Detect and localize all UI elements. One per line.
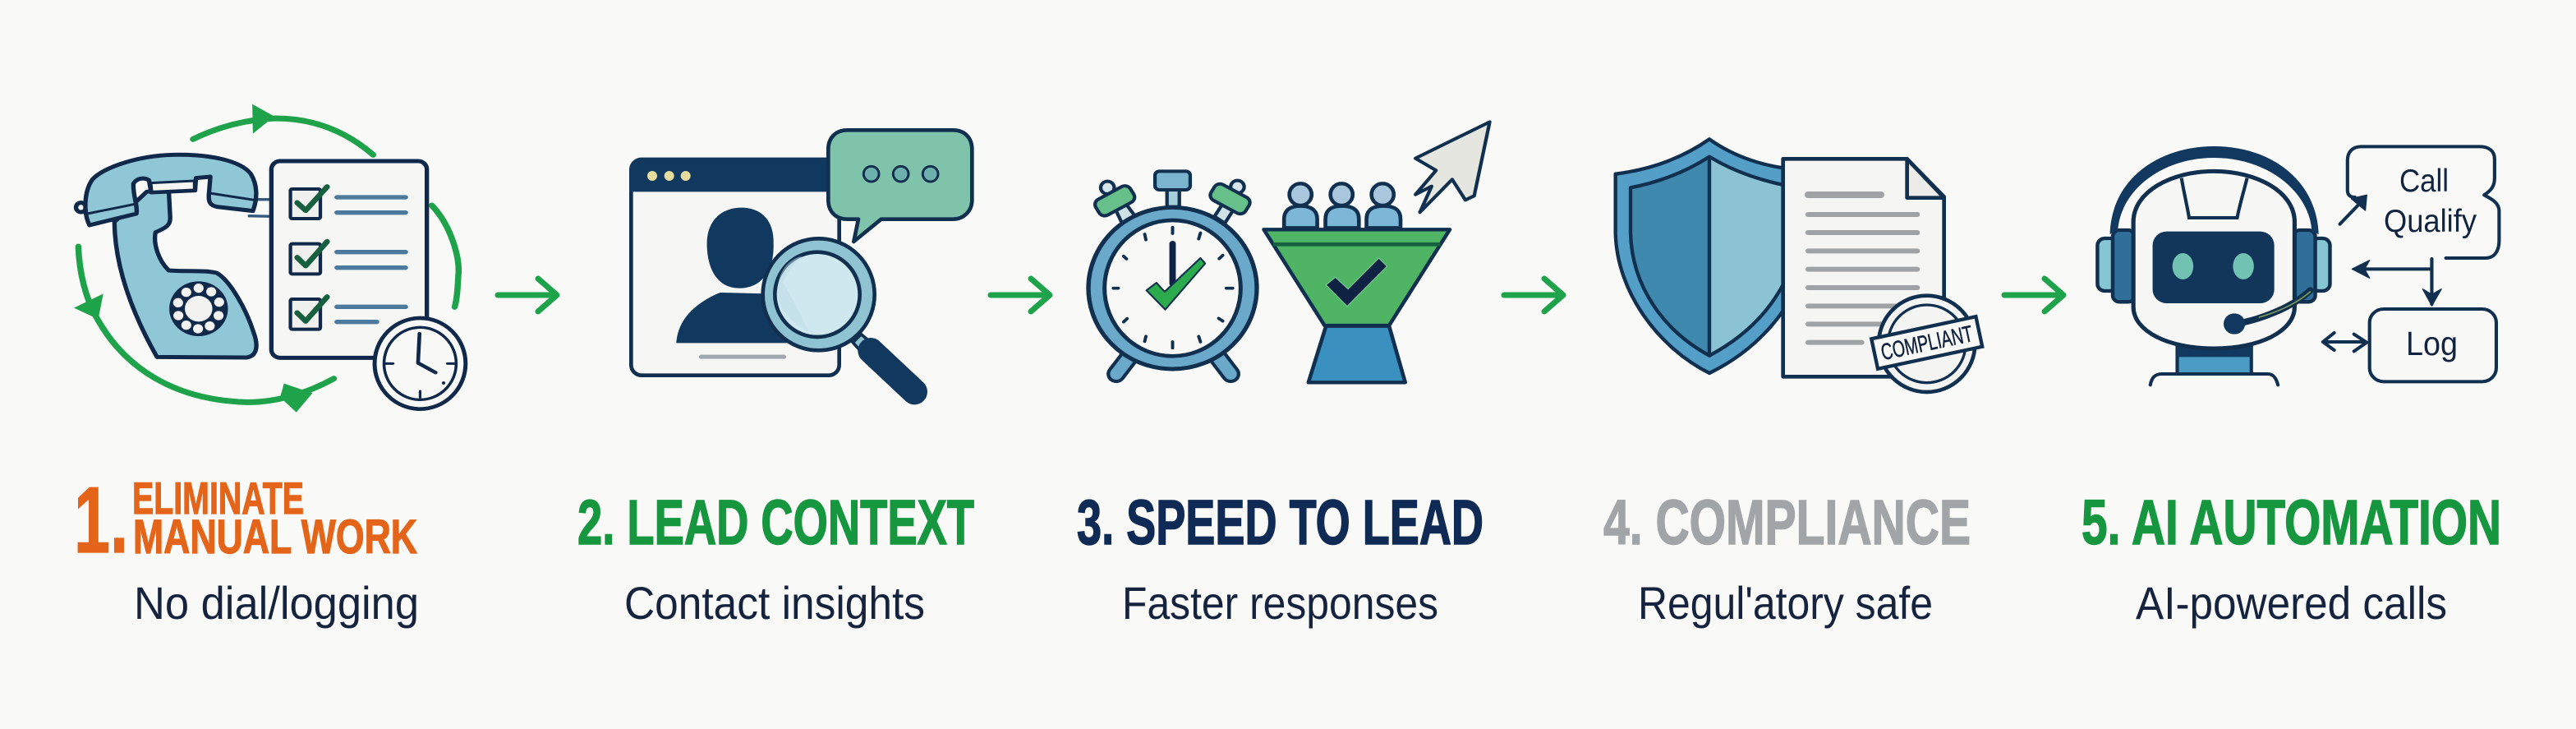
icon: handset <box>76 155 256 225</box>
icon 3: alarm clock and lead funnel <box>1088 122 1490 382</box>
icon: microphone <box>2224 290 2310 335</box>
arrow 1 <box>498 279 557 311</box>
icon: magnifier <box>763 238 914 392</box>
icon: cursor arrow <box>1415 122 1490 212</box>
icon 4: shield, document and compliant stamp <box>1616 139 1982 392</box>
subtext 1: No dial/logging <box>134 577 419 629</box>
icon: workflow connectors <box>2323 146 2499 381</box>
subtext 5: AI-powered calls <box>2136 577 2447 629</box>
icon: chat bubble <box>828 130 972 242</box>
label: Log: Log <box>2406 325 2458 362</box>
heading 1 <box>74 468 417 573</box>
icon: browser window <box>629 158 840 376</box>
icon: robot head <box>2133 171 2294 348</box>
icon: handset lip lines <box>87 193 254 214</box>
icon: headband <box>2110 146 2319 234</box>
icon: person silhouette <box>676 208 791 343</box>
subtext 3: Faster responses <box>1122 577 1438 629</box>
icon: three leads <box>1284 183 1401 228</box>
icon: compliant stamp <box>1871 296 1982 392</box>
icon: clock <box>375 318 466 409</box>
arrow 2 <box>991 279 1050 311</box>
heading 2: 2. LEAD CONTEXT <box>577 487 974 558</box>
panel: checklist <box>271 161 427 358</box>
label: Call: Call <box>2399 164 2449 199</box>
icon: shield <box>1616 139 1805 373</box>
icon: phone dial <box>169 281 228 336</box>
icon: funnel <box>1264 229 1450 382</box>
icon: green cycle arrows <box>74 104 458 413</box>
heading 1: 1. <box>74 468 128 573</box>
label: Qualify: Qualify <box>2384 204 2477 239</box>
heading 4: 4. COMPLIANCE <box>1603 487 1971 558</box>
icon: compliant stamp: COMPLIANT <box>1879 321 1975 365</box>
icon: cord <box>248 200 273 216</box>
arrow 3 <box>1504 279 1563 311</box>
icon 1: phone and checklist with cycle arrows <box>74 104 466 413</box>
icon: rotary phone body <box>114 189 256 358</box>
heading 1: MANUAL WORK <box>133 510 417 564</box>
subtext 4: Regul'atory safe <box>1638 577 1933 629</box>
icon: ear cups <box>2097 230 2330 302</box>
icon 5: AI robot with workflow <box>2097 146 2499 385</box>
panel: document <box>1783 159 1944 376</box>
subtext 2: Contact insights <box>624 577 925 629</box>
heading 3: 3. SPEED TO LEAD <box>1077 487 1484 558</box>
icon 2: browser profile with magnifier and chat bubble <box>629 130 972 392</box>
heading 1: ELIMINATE <box>132 473 304 524</box>
arrow 4 <box>2004 279 2063 311</box>
icon: alarm clock <box>1088 171 1257 374</box>
icon: neck and shoulders <box>2150 347 2278 385</box>
